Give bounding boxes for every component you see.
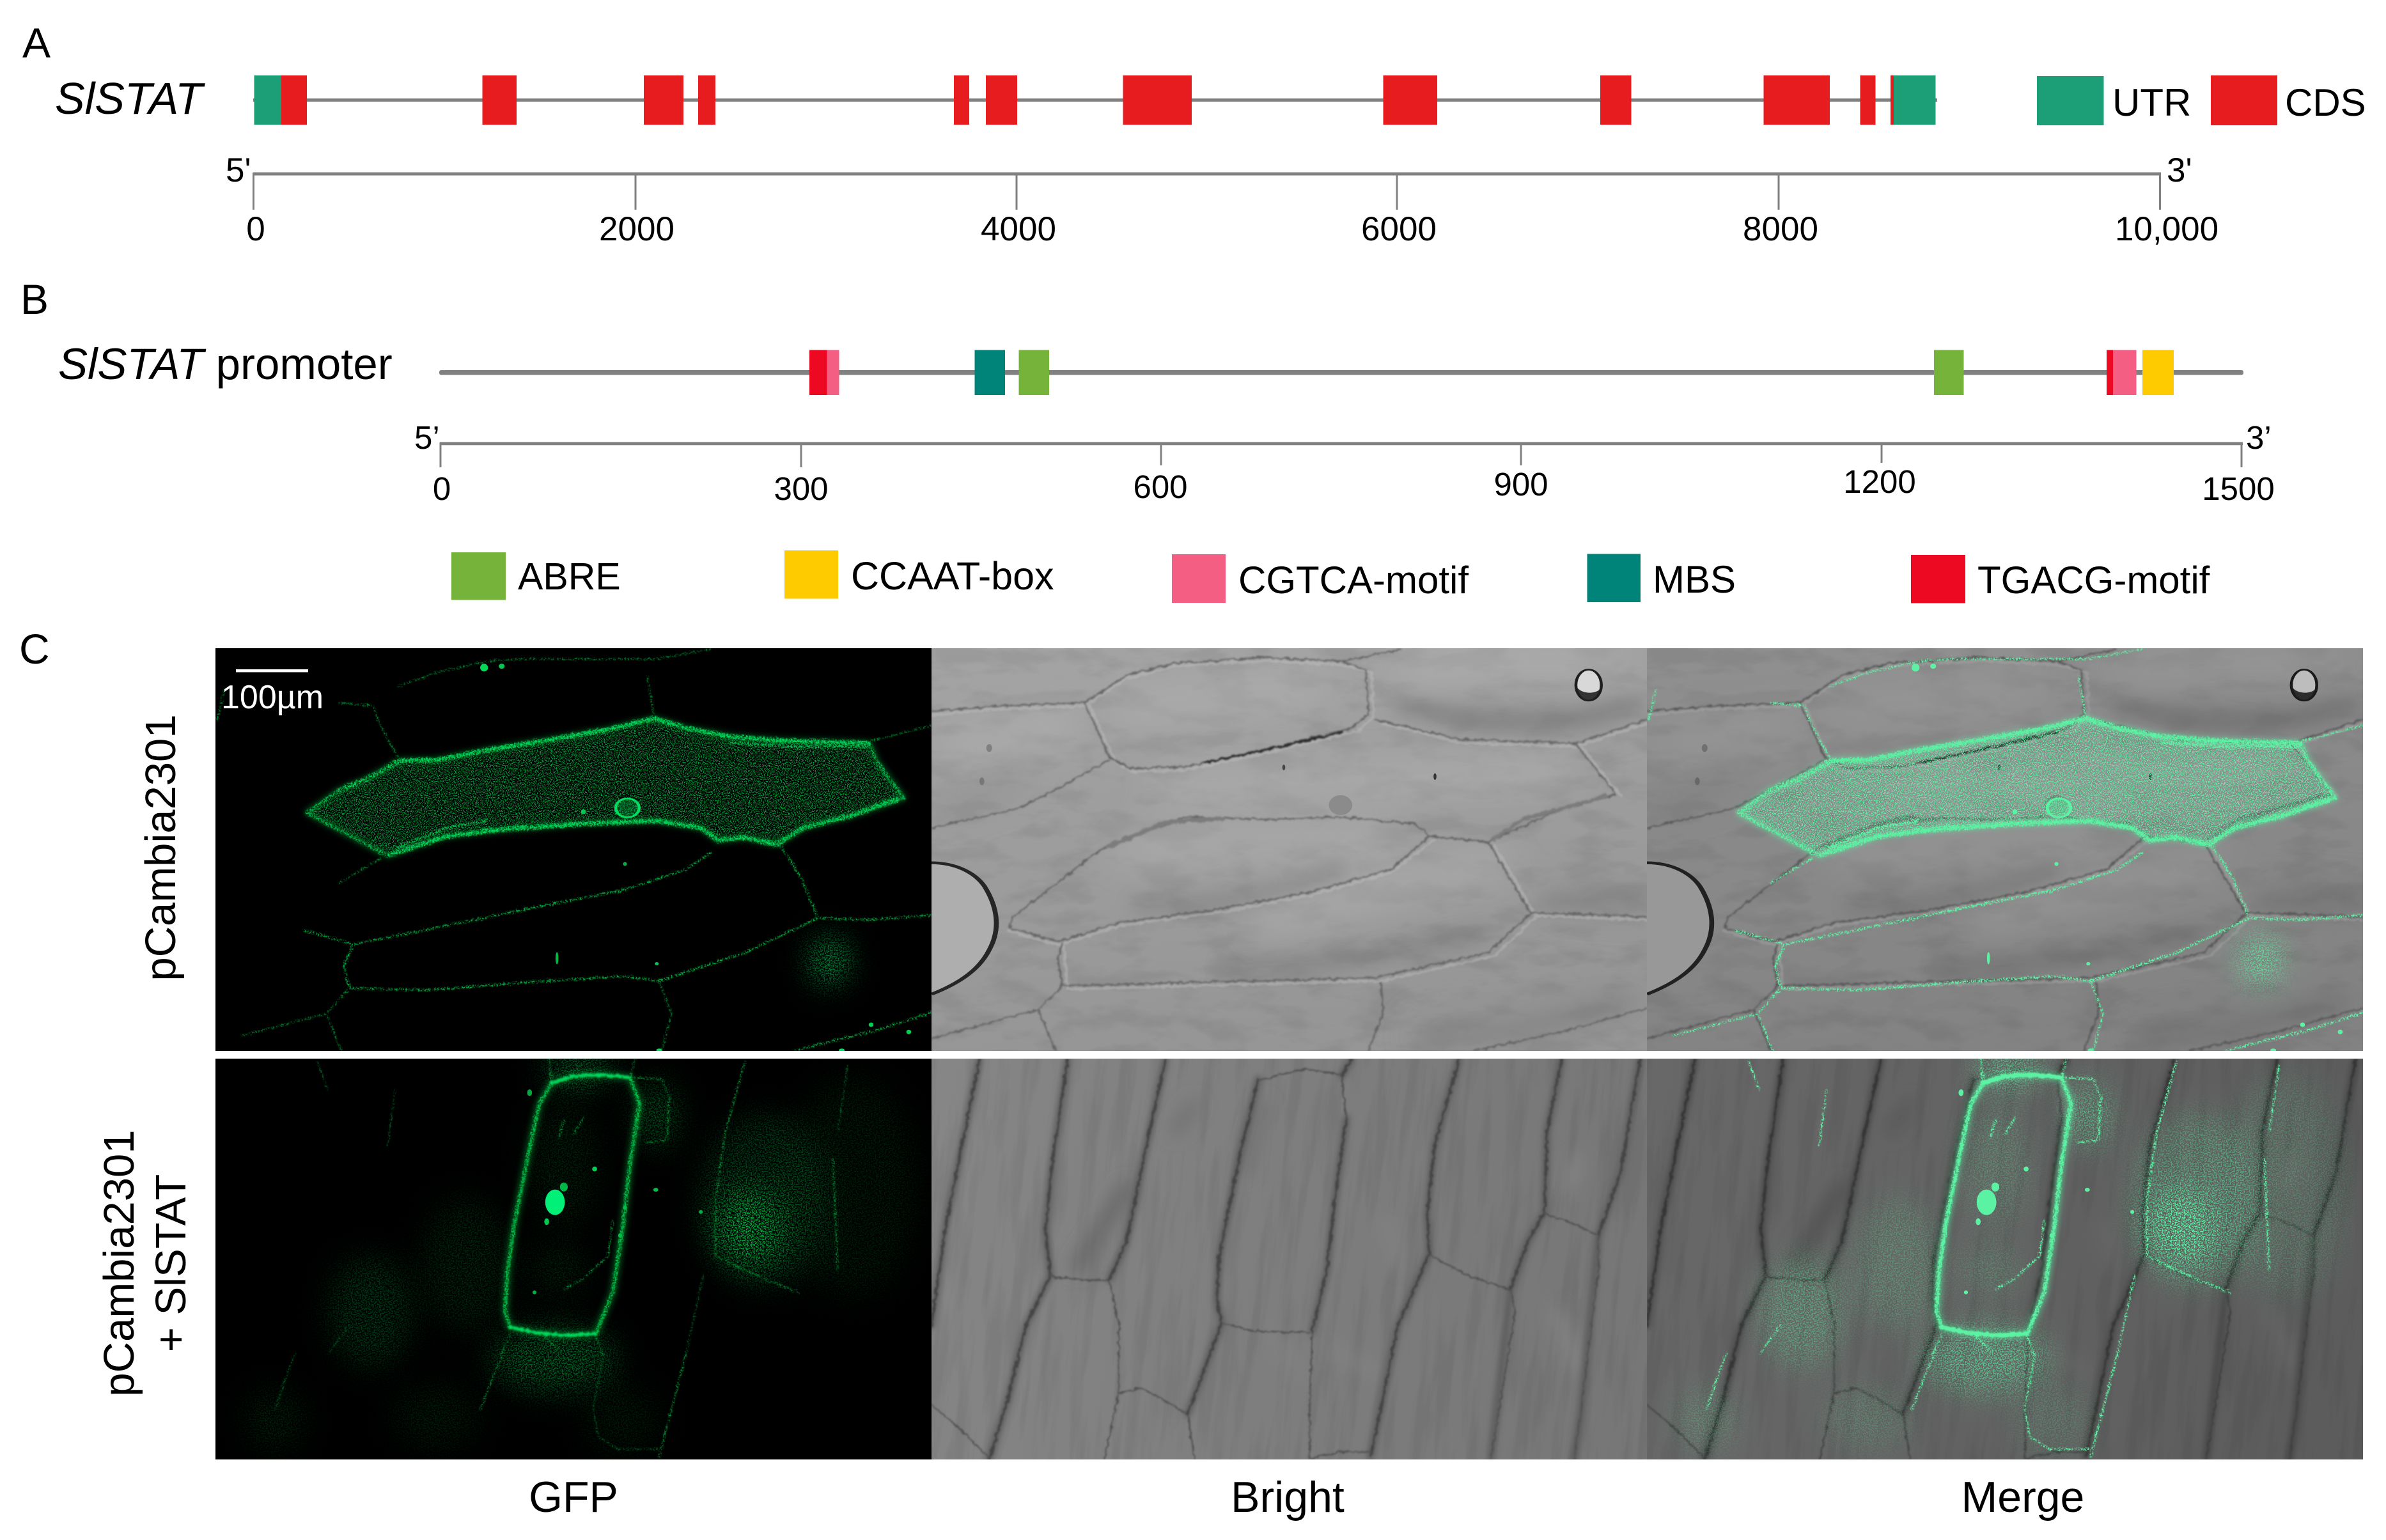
cis-element boxes: [809, 350, 2174, 395]
panel C: GFP localisation microscopy: [19, 625, 2386, 1540]
ABRE swatch: [451, 552, 506, 600]
5' UTR: [254, 75, 281, 125]
panel letter A: A: [22, 19, 51, 66]
scale bar label: 100µm: [221, 679, 324, 716]
axis end labels: 3': [2167, 152, 2192, 189]
MBS box: [974, 350, 1005, 395]
row label line 1: pCambia2301: [95, 1130, 143, 1397]
CCAAT-box swatch: [784, 550, 838, 598]
CCAAT-box: [2142, 350, 2174, 395]
axis tick labels: [246, 210, 2218, 248]
micrograph: merge, pCambia2301: [1647, 648, 2363, 1052]
panel A: SlSTAT gene structure: [22, 19, 2366, 248]
CGTCA-motif box 2: [2113, 350, 2137, 395]
TGACG-motif label: TGACG-motif: [1977, 559, 2210, 602]
column label Bright: Bright: [1231, 1473, 1345, 1521]
gene name: SlSTAT: [55, 74, 205, 123]
ABRE label: ABRE: [518, 556, 621, 598]
axis tick labels: 600: [1133, 469, 1188, 505]
axis tick labels: 8000: [1743, 210, 1818, 248]
micrograph: merge, pCambia2301 + SlSTAT: [1522, 917, 2386, 1540]
axis tick labels: 6000: [1361, 210, 1437, 248]
gene backbone line: [253, 98, 1937, 102]
UTR swatch: [2037, 76, 2103, 125]
axis tick labels: 2000: [599, 210, 674, 248]
column label Merge: Merge: [1961, 1473, 2084, 1521]
axis tick labels: 1200: [1843, 463, 1916, 500]
axis line: [253, 173, 2161, 175]
CGTCA-motif swatch: [1172, 554, 1226, 603]
promoter title: SlSTAT promoter: [58, 339, 393, 389]
row label pCambia2301 + SlSTAT: [95, 1130, 195, 1397]
TGACG-motif box 1: [809, 350, 827, 395]
panel letter B: B: [20, 276, 49, 323]
axis tick labels: 300: [774, 471, 829, 507]
legend: UTR and CDS: [2037, 75, 2366, 125]
axis end labels: [414, 419, 2272, 456]
axis end labels: [226, 152, 2192, 189]
CGTCA-motif box 1: [827, 350, 839, 395]
panel letter C: C: [19, 625, 50, 673]
column label GFP: GFP: [529, 1473, 618, 1521]
exon and UTR boxes: [254, 75, 1936, 125]
micrograph: bright field, pCambia2301: [932, 648, 1648, 1051]
axis end labels: 3’: [2246, 419, 2272, 456]
ABRE box: [1019, 350, 1049, 395]
axis end labels: 5': [226, 152, 251, 189]
micrograph: GFP, pCambia2301 + SlSTAT: [215, 1059, 932, 1459]
axis ticks: [253, 173, 2161, 210]
MBS label: MBS: [1653, 558, 1736, 601]
axis tick labels: [433, 463, 2275, 507]
micrograph: GFP, pCambia2301: [215, 648, 932, 1052]
TGACG-motif swatch: [1911, 555, 1965, 603]
axis line: [440, 442, 2243, 445]
axis tick labels: 1500: [2202, 471, 2275, 507]
ABRE box 2: [1934, 350, 1964, 395]
UTR label: UTR: [2112, 81, 2191, 124]
scale axis B: [414, 419, 2275, 507]
MBS swatch: [1587, 554, 1641, 602]
promoter backbone line: [439, 370, 2243, 375]
TGACG-motif box 2: [2107, 350, 2114, 395]
3' UTR: [1894, 75, 1936, 125]
scale bar: [236, 669, 308, 673]
scale axis A: [226, 152, 2218, 248]
axis tick labels: 0: [433, 471, 451, 507]
micrograph: bright field, pCambia2301 + SlSTAT: [807, 917, 1772, 1540]
axis tick labels: 10,000: [2115, 210, 2218, 248]
axis ticks: [440, 442, 2243, 467]
CCAAT-box label: CCAAT-box: [851, 554, 1054, 598]
row label line 2: + SlSTAT: [147, 1174, 195, 1352]
CDS label: CDS: [2285, 81, 2366, 124]
CDS swatch: [2211, 75, 2277, 125]
axis tick labels: 0: [246, 210, 265, 248]
legend: cis-elements: [451, 550, 2210, 603]
row label pCambia2301: pCambia2301: [137, 714, 185, 981]
axis end labels: 5’: [414, 419, 440, 456]
CGTCA-motif label: CGTCA-motif: [1238, 559, 1469, 602]
CDS exons: [281, 75, 1894, 125]
panel B: SlSTAT promoter: [20, 276, 2275, 603]
axis tick labels: 4000: [981, 210, 1056, 248]
axis tick labels: 900: [1493, 466, 1548, 502]
